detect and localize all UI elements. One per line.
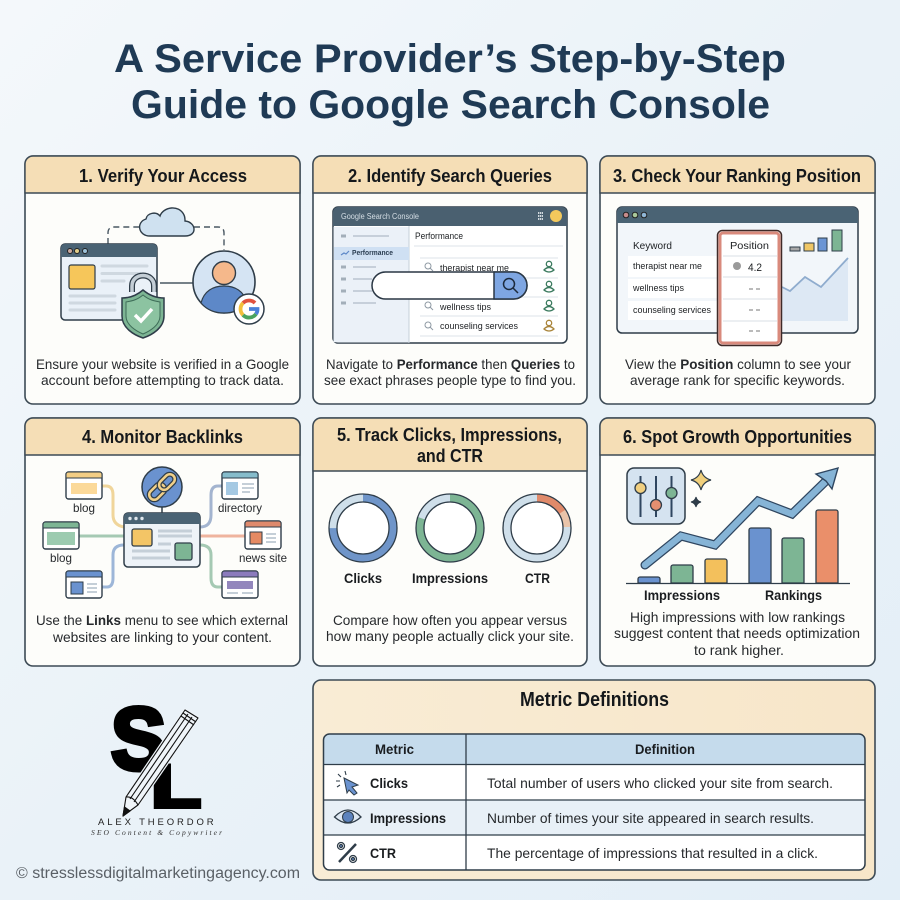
icon: sliders bbox=[627, 468, 685, 524]
title bbox=[114, 37, 786, 127]
icon: site (bottom left) bbox=[66, 571, 102, 598]
logo: Alex Theordor: S bbox=[111, 689, 166, 788]
panel: metric definitions bbox=[313, 680, 875, 880]
heading: step 3: 3. Check Your Ranking Position bbox=[613, 166, 861, 186]
labels: chart groups: Impressions bbox=[644, 587, 720, 603]
icon: cursor click bbox=[336, 771, 358, 795]
text: step 6 description bbox=[614, 609, 860, 658]
labels: chart groups bbox=[644, 587, 822, 603]
icon: directory site: directory bbox=[218, 501, 262, 515]
table: metrics bbox=[324, 734, 865, 870]
heading: metric definitions: Metric Definitions bbox=[520, 689, 669, 711]
panel: 2. Identify Search Queries bbox=[313, 156, 587, 404]
illustration: rank table window: therapist near me bbox=[633, 261, 702, 271]
copyright text: © stresslessdigitalmarketingagency.com bbox=[16, 865, 300, 882]
icon: padlock shield bbox=[122, 276, 164, 338]
logo: Alex Theordor bbox=[91, 689, 222, 837]
heading: step 1: 1. Verify Your Access bbox=[79, 166, 247, 186]
callout: position column bbox=[718, 230, 782, 346]
icon: pencil bbox=[123, 710, 198, 816]
text: step 3 description bbox=[625, 356, 851, 388]
labels: donut names: Clicks bbox=[344, 570, 382, 586]
icon: blog site (top): blog bbox=[73, 501, 95, 515]
table: metrics: CTR bbox=[370, 845, 396, 861]
panel: 6. Spot Growth Opportunities bbox=[600, 418, 875, 666]
labels: donut names bbox=[344, 570, 550, 586]
illustration: rank table window: Keyword bbox=[633, 240, 672, 252]
callout: position column: 4.2 bbox=[748, 262, 762, 274]
heading: step 4: 4. Monitor Backlinks bbox=[82, 427, 243, 447]
text: step 4 description: Use the Links menu to see which external bbox=[36, 612, 288, 628]
title: Guide to Google Search Console bbox=[131, 83, 770, 127]
icon: site (bottom right) bbox=[222, 571, 258, 598]
table: metrics: Number of times your site appeared in search results. bbox=[487, 810, 814, 826]
text: step 3 description: View the Position column to see your bbox=[625, 356, 851, 372]
labels: donut names: CTR bbox=[525, 570, 550, 586]
text: step 6 description: suggest content that needs optimization bbox=[614, 625, 860, 641]
illustration: search console window: Performance bbox=[415, 231, 463, 241]
arrow: growth trend bbox=[645, 468, 838, 565]
text: step 6 description: to rank higher. bbox=[694, 642, 784, 658]
labels: donut names: Impressions bbox=[412, 570, 488, 586]
table: metrics: The percentage of impressions that resulted in a click. bbox=[487, 845, 818, 861]
text: step 6 description: High impressions with low rankings bbox=[630, 609, 845, 625]
panel: 4. Monitor Backlinks bbox=[25, 418, 300, 666]
icon: link line bbox=[160, 282, 194, 284]
text: step 3 description: average rank for specific keywords. bbox=[630, 372, 845, 388]
illustration: search console window: counseling services bbox=[440, 321, 518, 331]
icon: news site: news site bbox=[239, 551, 287, 565]
table: metrics: Metric bbox=[375, 741, 414, 757]
icon: directory site bbox=[218, 472, 262, 515]
icon: eye bbox=[334, 810, 361, 823]
text: step 2 description: see exact phrases people type to find you. bbox=[324, 372, 576, 388]
icon: news site bbox=[239, 521, 287, 565]
logo: Alex Theordor: ALEX THEORDOR bbox=[98, 817, 216, 828]
icon: website window bbox=[61, 244, 157, 320]
icon: sparkles bbox=[691, 470, 711, 507]
illustration: rank table window: counseling services bbox=[633, 305, 711, 315]
illustration: search console window: Google Search Console bbox=[341, 212, 419, 221]
panel: 3. Check Your Ranking Position bbox=[600, 156, 875, 404]
icon: dashed links to cloud bbox=[108, 227, 224, 250]
text: step 2 description: Navigate to Performance then Queries to bbox=[326, 356, 575, 372]
chart: bars bbox=[626, 510, 850, 584]
title: A Service Provider’s Step-by-Step bbox=[114, 37, 786, 81]
icon: blog site (left) bbox=[43, 522, 79, 565]
illustration: search console window: therapist near me bbox=[440, 263, 509, 273]
labels: chart groups: Rankings bbox=[765, 587, 822, 603]
icon: blog site (left): blog bbox=[50, 551, 72, 565]
table: metrics: Clicks bbox=[370, 775, 408, 791]
heading: step 5: 5. Track Clicks, Impressions, bbox=[337, 425, 562, 445]
text: step 4 description bbox=[36, 612, 288, 645]
icon: chain link circle bbox=[142, 467, 182, 513]
text: step 5 description: how many people actually click your site. bbox=[326, 628, 574, 644]
heading: step 5: and CTR bbox=[417, 446, 483, 466]
text: step 2 description bbox=[324, 356, 576, 388]
heading: step 5 bbox=[337, 425, 562, 466]
icon: central site window bbox=[124, 513, 200, 567]
icon: user avatar bbox=[193, 251, 255, 313]
text: step 5 description: Compare how often you appear versus bbox=[333, 612, 567, 628]
chart: CTR donut bbox=[503, 494, 571, 562]
icon: blog site (top) bbox=[66, 472, 102, 515]
illustration: rank table window bbox=[617, 207, 858, 333]
heading: step 6: 6. Spot Growth Opportunities bbox=[623, 427, 852, 447]
logo: Alex Theordor: L bbox=[151, 753, 201, 820]
icon: search bar bbox=[372, 272, 527, 299]
illustration: search console window: wellness tips bbox=[439, 302, 491, 312]
text: step 1 description: Ensure your website is verified in a Google bbox=[36, 356, 289, 372]
table: metrics: Total number of users who clicked your site from search. bbox=[487, 775, 833, 791]
illustration: search console window: Performance bbox=[352, 248, 393, 257]
text: step 5 description bbox=[326, 612, 574, 644]
icon: cloud bbox=[140, 208, 194, 236]
callout: position column: Position bbox=[730, 240, 769, 252]
logo: Alex Theordor: SEO Content & Copywriter bbox=[91, 828, 222, 837]
chart: clicks donut bbox=[329, 494, 397, 562]
diagram: connectors bbox=[79, 486, 245, 587]
table: metrics: Impressions bbox=[370, 810, 446, 826]
chart: impressions donut bbox=[416, 494, 484, 562]
icon: percent bbox=[338, 842, 356, 862]
illustration: rank table window: wellness tips bbox=[632, 283, 684, 293]
panel: 5. Track Clicks, Impressions, and CTR bbox=[313, 418, 587, 666]
text: step 1 description: account before attempting to track data. bbox=[41, 372, 284, 388]
table: metrics: Definition bbox=[635, 741, 695, 757]
text: step 1 description bbox=[36, 356, 289, 388]
illustration: search console window bbox=[333, 207, 567, 343]
panel: 1. Verify Your Access bbox=[25, 156, 300, 404]
heading: step 2: 2. Identify Search Queries bbox=[348, 166, 552, 186]
text: step 4 description: websites are linking to your content. bbox=[52, 629, 272, 645]
icon: Google badge bbox=[234, 294, 264, 324]
